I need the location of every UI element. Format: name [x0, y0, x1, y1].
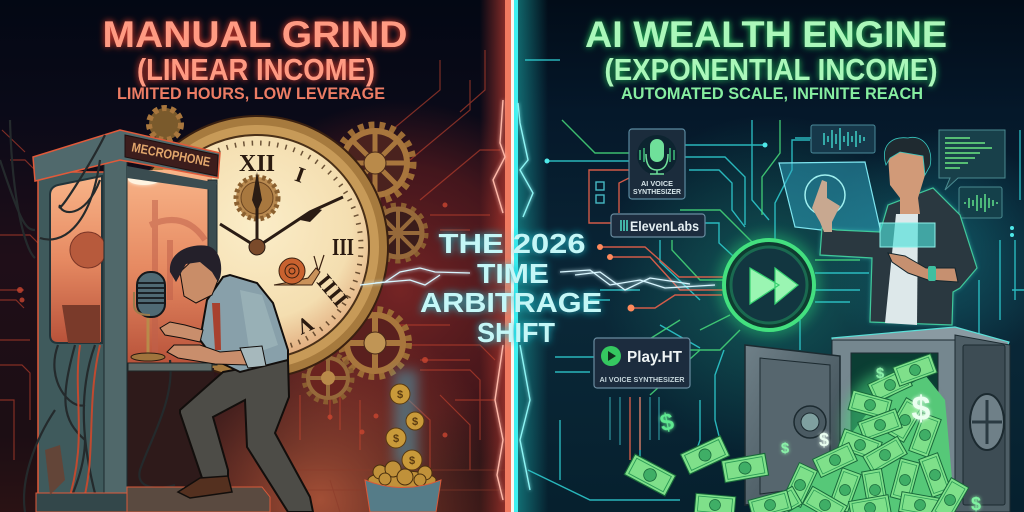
man: raised hand	[812, 180, 840, 232]
illustration: falling coins and bucket: $	[409, 455, 415, 467]
gear: upper right	[338, 126, 412, 200]
cables on booth	[0, 120, 175, 512]
gear: top behind booth	[149, 108, 181, 140]
clock centre gear	[236, 177, 278, 219]
man: shoe	[178, 476, 232, 498]
coins	[386, 384, 424, 470]
safe front frame	[832, 340, 955, 512]
booth roof	[33, 130, 220, 181]
logo card: Play.HT: Play.HT	[627, 349, 682, 366]
man: jacket	[820, 188, 977, 325]
illustration: open safe full of cash	[745, 327, 1010, 512]
microphone head	[134, 272, 165, 317]
title: the 2026 time arbitrage shift: SHIFT	[477, 317, 555, 348]
illustration: AI voice synthesizer card	[629, 129, 685, 199]
icon: snail	[274, 255, 324, 285]
man: hair	[884, 137, 931, 175]
clock numerals	[239, 151, 354, 340]
booth back wall	[127, 170, 212, 365]
illustration: exhausted man at microphone	[127, 245, 313, 512]
hologram: touch tablet	[779, 162, 882, 237]
cash pile	[758, 354, 969, 512]
safe side	[955, 335, 1010, 512]
clock numerals: I	[292, 161, 308, 188]
logo card: Play.HT	[594, 338, 690, 388]
rust patch	[45, 445, 65, 495]
icon: microphone	[640, 139, 674, 174]
subheading: limited hours: LIMITED HOURS, LOW LEVERAGE	[117, 85, 385, 103]
clock numerals: III	[332, 235, 354, 261]
man: watch	[928, 266, 936, 281]
logo card: Play.HT: AI VOICE SYNTHESIZER	[600, 377, 684, 384]
glowing dollar signs: $	[876, 365, 885, 382]
clock case	[126, 116, 388, 378]
clock numerals: IIII	[312, 269, 353, 311]
illustration: confident man with jacket	[812, 137, 977, 325]
inside glow	[842, 370, 938, 490]
man: rolled sleeve	[240, 346, 266, 368]
man: head	[180, 258, 218, 303]
illustration: desk and microphone	[128, 272, 212, 371]
heading: manual grind	[102, 14, 407, 87]
booth left window	[50, 176, 102, 343]
heading: manual grind: MANUAL GRIND	[102, 14, 407, 55]
booth sign: MECROPHONE	[130, 140, 212, 170]
divider: lightning seam	[493, 0, 533, 512]
title: the 2026 time arbitrage shift: ARBITRAGE	[420, 287, 602, 318]
icon: green dollar sign: $	[658, 408, 677, 437]
man: teal outline glow	[820, 188, 977, 325]
icon: fast-forward button	[717, 233, 821, 337]
hologram: green waveform panel	[959, 187, 1002, 218]
safe top	[832, 327, 1009, 352]
flying cash	[624, 436, 792, 512]
gear: bottom	[305, 355, 351, 401]
illustration: giant clock with gears	[126, 108, 425, 401]
booth light	[128, 173, 160, 185]
title: the 2026 time arbitrage shift: TIME	[477, 258, 549, 289]
hologram: code panel	[939, 130, 1005, 190]
title: the 2026 time arbitrage shift	[420, 228, 602, 348]
heading: manual grind: (LINEAR INCOME)	[137, 52, 375, 87]
man: t-shirt	[885, 214, 918, 325]
man: shirt highlight	[240, 290, 278, 355]
panel: AI wealth engine background	[512, 0, 1024, 512]
illustration: falling coins and bucket: $	[412, 416, 418, 428]
glowing dollar signs: $	[781, 440, 790, 457]
safe door	[745, 345, 840, 505]
microphone stand	[146, 315, 150, 355]
man: trousers	[180, 360, 313, 512]
title: the 2026 time arbitrage shift: THE 2026	[438, 228, 586, 259]
hologram: chest card	[880, 223, 935, 247]
hologram: waveform panel	[811, 125, 875, 153]
glowing dollar signs: $	[912, 390, 931, 428]
arrow: lightning from title to button	[560, 270, 715, 290]
man: lower forearm and hand	[167, 345, 248, 365]
microphone base	[131, 353, 165, 361]
booth top frame	[127, 166, 218, 190]
circuit traces: AI side	[525, 60, 1024, 500]
illustration: falling coins and bucket	[365, 370, 441, 512]
logo card: ElevenLabs	[611, 214, 705, 237]
arrow: lightning from clock to title	[360, 268, 470, 285]
man: shirt	[200, 275, 288, 372]
illustration: AI voice synthesizer card: SYNTHESIZER	[633, 189, 681, 196]
illustration: AI voice synthesizer card: AI VOICE	[641, 181, 673, 188]
man: hair	[170, 245, 221, 282]
bucket coins	[368, 461, 436, 489]
safe dial	[970, 394, 1004, 450]
platform	[127, 487, 270, 512]
glowing dollar signs: $	[819, 430, 829, 450]
bucket	[365, 480, 441, 512]
booth pillar	[104, 158, 127, 504]
man: neck and face	[888, 146, 925, 214]
booth base	[36, 493, 127, 512]
gear: lower right	[342, 310, 408, 376]
man: forearm and lower hand	[888, 253, 958, 282]
man: upper forearm and hand	[160, 322, 203, 342]
illustration: falling coins and bucket: $	[397, 389, 403, 401]
man: tie	[212, 303, 221, 350]
illustration: falling coins and bucket: $	[393, 433, 399, 445]
gear: middle right	[371, 206, 425, 260]
desk	[128, 363, 212, 371]
illustration: voice booth labelled Microphone	[0, 120, 220, 512]
heading: AI wealth engine	[585, 14, 947, 87]
safe interior	[851, 353, 938, 512]
panel: manual grind background	[0, 0, 510, 512]
clock numerals: XII	[239, 151, 275, 177]
heading: AI wealth engine: AI WEALTH ENGINE	[585, 14, 947, 55]
logo card: ElevenLabs: ElevenLabs	[630, 218, 699, 234]
stream of light	[394, 370, 418, 465]
booth lower interior	[127, 368, 214, 495]
subheading: automated scale: AUTOMATED SCALE, INFINITE REACH	[621, 85, 923, 103]
booth right frame	[208, 180, 217, 365]
clock numerals: V	[293, 311, 318, 340]
clock hands	[220, 172, 343, 255]
glowing dollar signs	[781, 365, 931, 457]
heading: AI wealth engine: (EXPONENTIAL INCOME)	[604, 52, 938, 87]
booth left wall	[38, 172, 106, 504]
